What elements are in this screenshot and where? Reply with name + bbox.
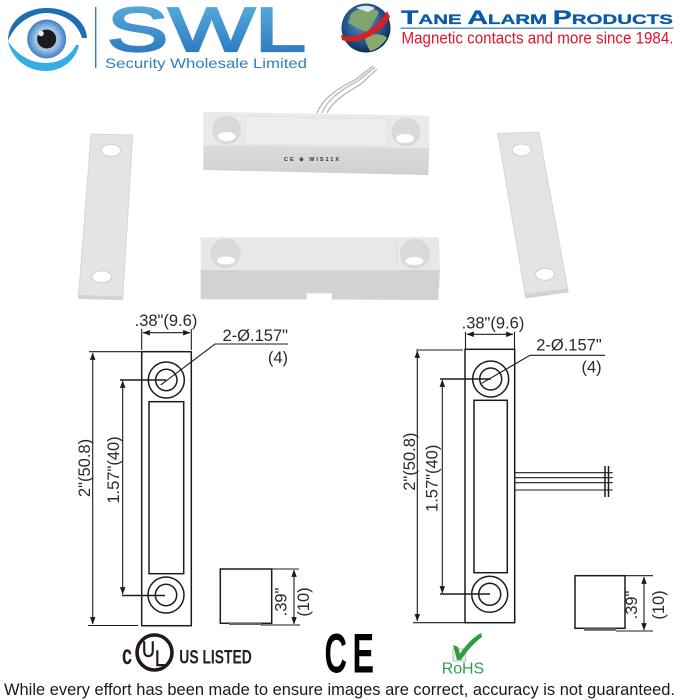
diagram: right side view with dimensions: (10) [650,590,668,620]
logo: cUL US Listed: c [122,639,132,670]
width dimension [135,312,197,350]
product photo: bottom magnet block [201,237,440,300]
hole callout [482,337,605,383]
height dimension [76,352,141,626]
product photo: wires [317,66,377,113]
diagram: right side view with dimensions: .39" [623,590,641,619]
width dimension [462,314,524,349]
product marking: CE ⊕ WIS11X [284,157,339,163]
hole callout: 2-Ø.157" [536,337,602,355]
SWL tagline: Security Wholesale Limited [105,56,307,71]
hole callout [161,327,288,385]
hole spacing dimension: 1.57"(40) [105,436,123,504]
diagram: left front view with dimensions [76,312,288,626]
logo: CE mark: E [352,622,374,684]
diagram: right front view with dimensions [401,314,613,623]
hole spacing dimension [423,379,491,594]
diagram: left side view with dimensions: .39" [272,587,290,616]
width dimension: .38"(9.6) [462,314,524,332]
height dimension: 2"(50.8) [401,433,419,491]
hole callout: (4) [582,359,602,377]
wire leads [515,466,613,497]
diagram: left side view with dimensions: (10) [295,587,313,617]
logo: SWL [8,0,307,71]
product photo: right magnet plate [498,132,568,298]
height dimension: 2"(50.8) [76,439,94,497]
hole spacing dimension: 1.57"(40) [423,445,441,512]
hole callout: 2-Ø.157" [223,327,288,345]
logo: cUL US Listed [122,635,252,671]
Tane wordmark: T ANE A LARM P RODUCTS [401,7,673,29]
icon: eye [8,8,87,71]
logo: RoHS [442,633,484,678]
logo: cUL US Listed: US LISTED [179,646,252,668]
logo: CE mark: C [324,622,347,684]
diagram: right side view with dimensions [575,576,668,631]
hole callout: (4) [268,349,288,367]
icon: globe [341,4,390,52]
width dimension: .38"(9.6) [135,312,197,330]
logo: RoHS: RoHS [442,660,484,678]
disclaimer: While every effort has been made to ensure images are correct, accuracy is not guaranteed. [4,680,675,699]
logo: Tane Alarm Products [341,4,674,52]
height dimension [401,350,465,623]
product photo: top switch block [203,112,429,175]
product photo: left magnet plate [78,134,133,300]
logo: cUL US Listed: L [155,646,165,671]
hole spacing dimension [105,380,166,596]
diagram: left side view with dimensions [220,569,313,625]
logo: cUL US Listed: U [142,637,155,662]
